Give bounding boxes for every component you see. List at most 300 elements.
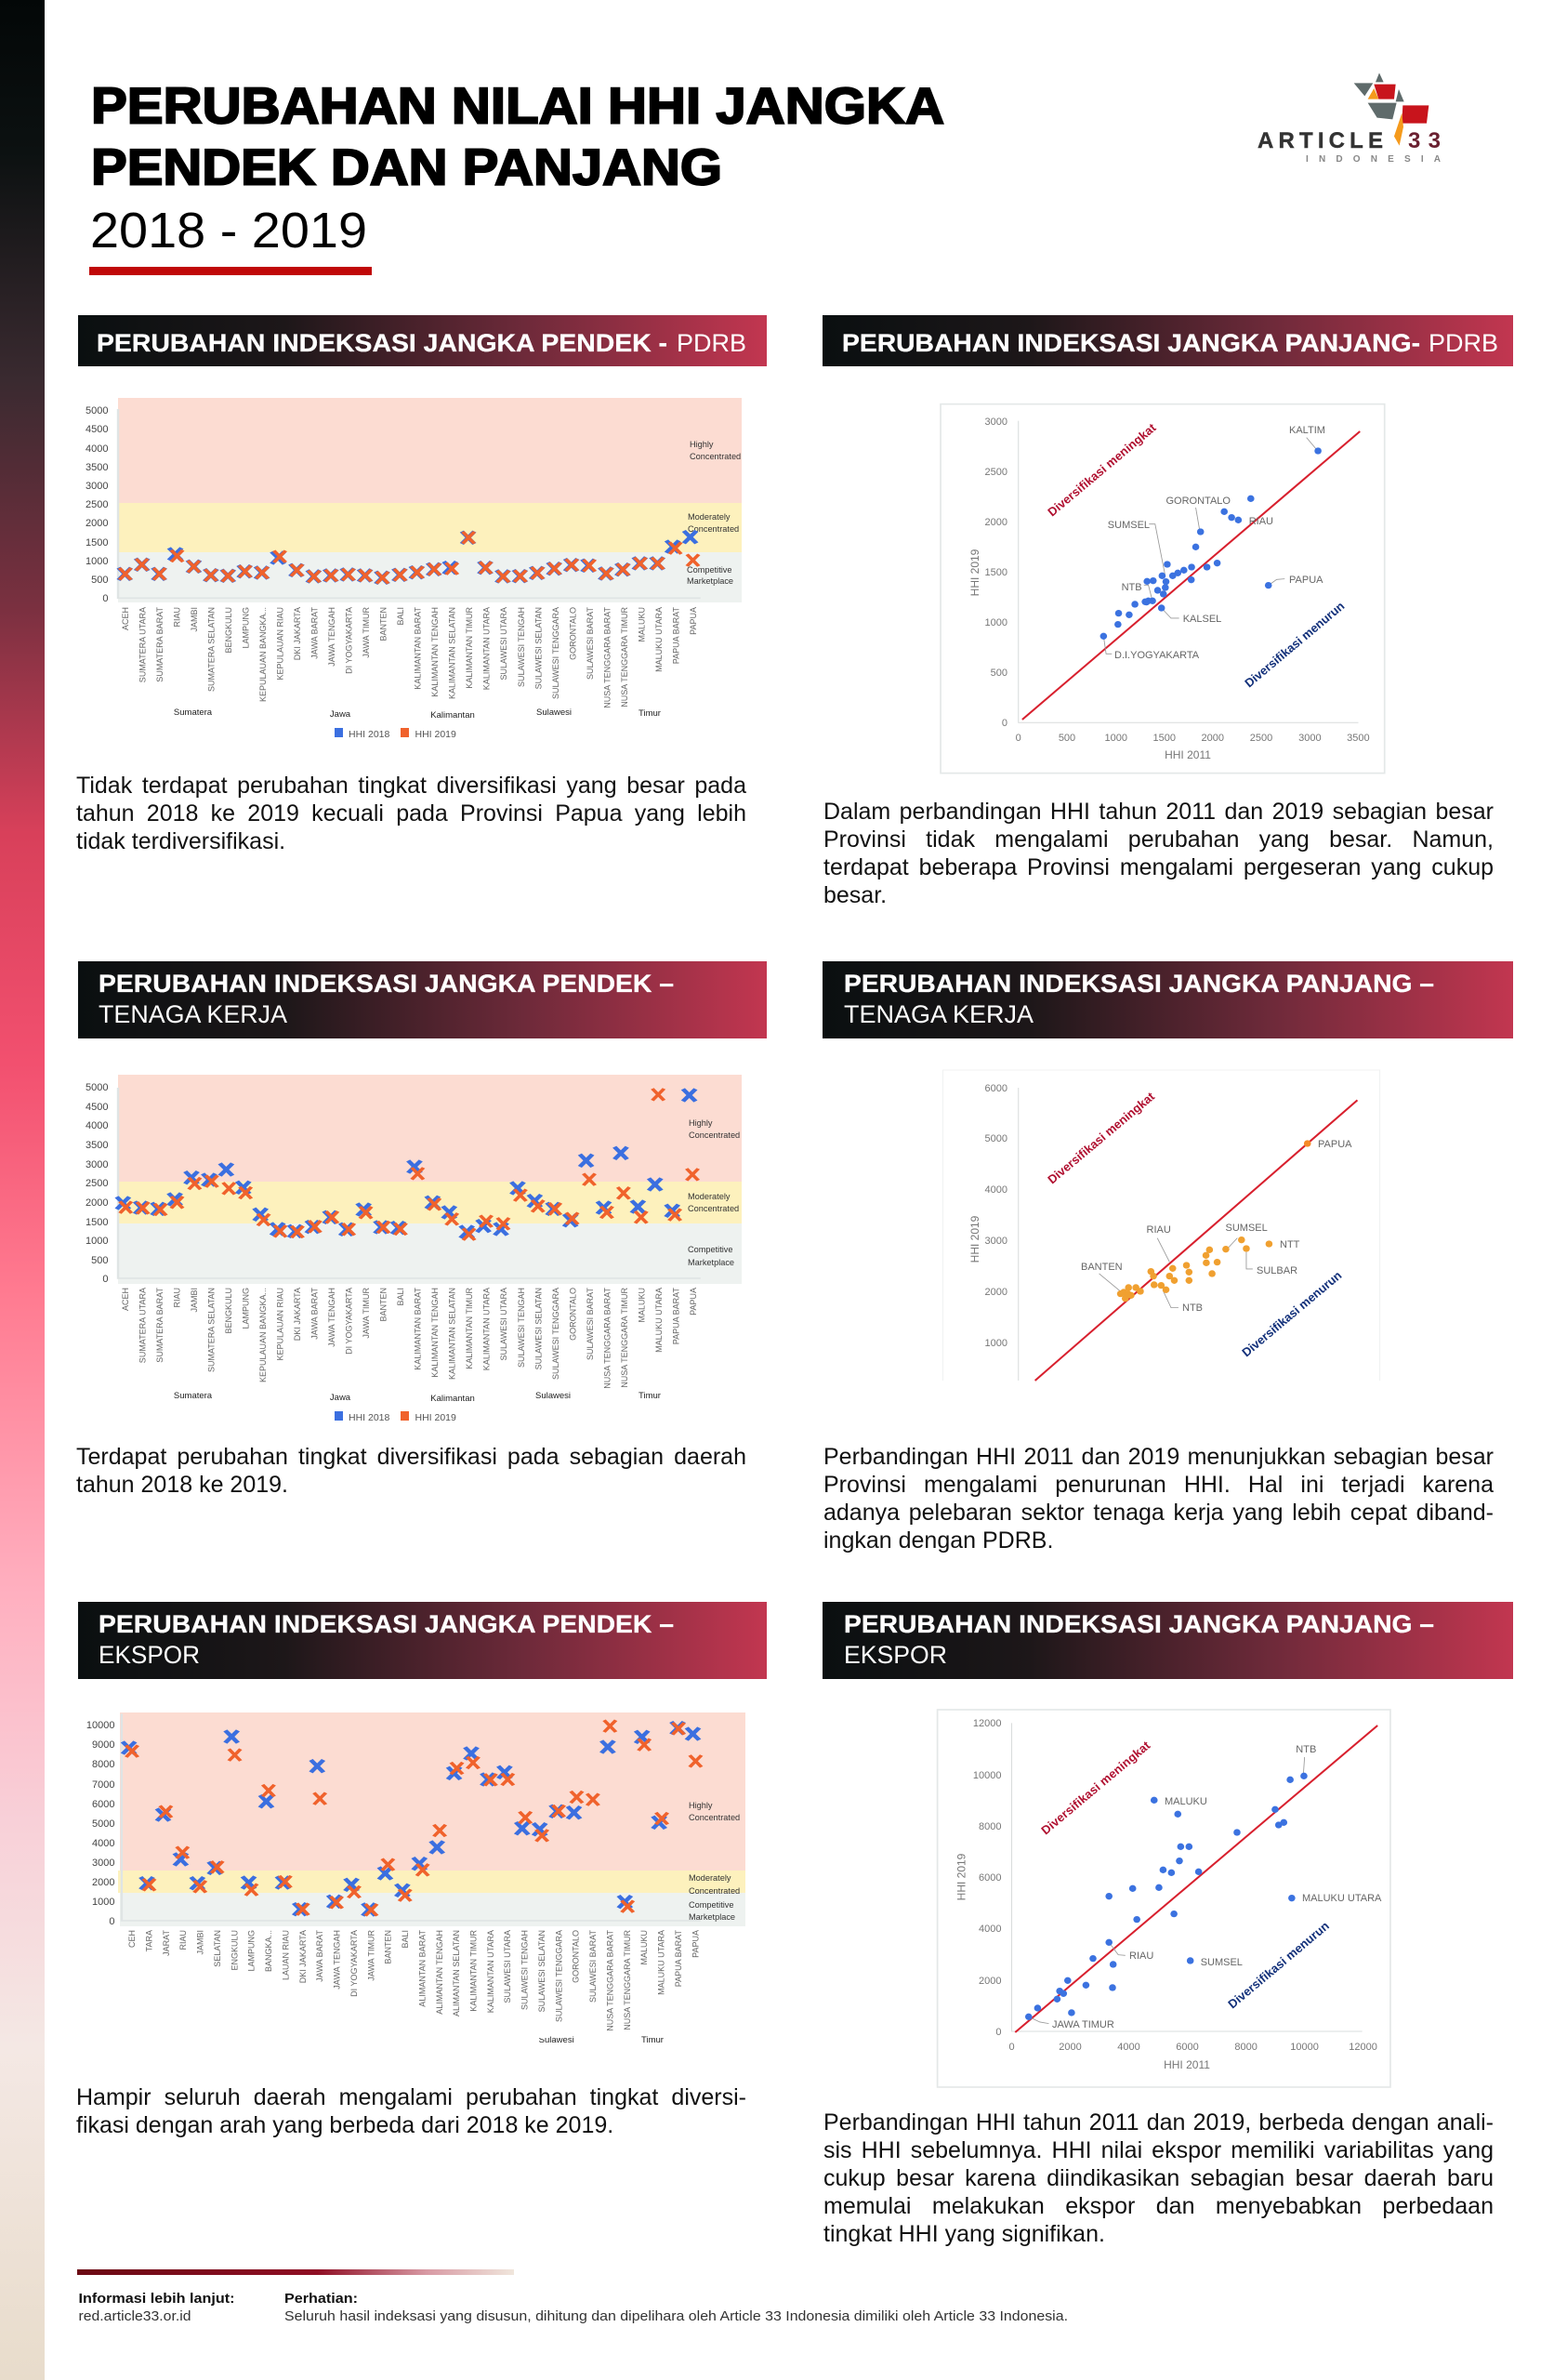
zone labels: Marketplace — [688, 1258, 734, 1267]
province labels: RIAU — [172, 1288, 181, 1308]
logo wordmark: ARTICLE — [1258, 128, 1383, 153]
title line 1: PERUBAHAN NILAI HHI JANGKA — [91, 76, 944, 134]
province labels: PAPUA BARAT — [671, 1287, 680, 1344]
point labels — [1052, 1744, 1382, 2030]
province labels: PAPUA BARAT — [671, 606, 680, 664]
axis ticks: 8000 — [1234, 2042, 1258, 2053]
zone labels: Marketplace — [687, 576, 733, 586]
markers HHI 2019 — [126, 1720, 702, 1916]
province labels: SULAWESI TENGGARA — [551, 1288, 560, 1380]
province labels: JARAT — [162, 1930, 171, 1956]
point labels — [1081, 1139, 1352, 1314]
province labels: BENGKULU — [224, 1288, 233, 1334]
province labels: JAWA BARAT — [310, 607, 320, 659]
zone labels: Concentrated — [689, 1130, 740, 1140]
axis ticks — [985, 416, 1370, 744]
province labels: SUMATERA BARAT — [155, 607, 165, 682]
region labels: Timur — [639, 1391, 661, 1401]
province labels: LAMPUNG — [241, 1288, 250, 1329]
province labels: JAWA BARAT — [310, 1288, 320, 1340]
axis titles — [955, 1853, 1210, 2071]
scatter chart tenaga kerja — [942, 1070, 1380, 1381]
band: highly concentrated — [118, 398, 742, 503]
header bar: TENAGA KERJA — [844, 1000, 1034, 1028]
y axis values: 3500 — [86, 1140, 108, 1151]
axis ticks: 6000 — [979, 1872, 1002, 1884]
footer info heading: Informasi lebih lanjut: — [78, 2291, 234, 2307]
axis ticks: 12000 — [973, 1718, 1002, 1729]
body text — [76, 772, 750, 860]
axis ticks: 4000 — [979, 1924, 1002, 1935]
zone labels — [689, 1801, 740, 1922]
province labels: SULAWESI UTARA — [499, 607, 508, 681]
province labels: BENGKULU — [224, 607, 233, 654]
axis ticks: 4000 — [985, 1184, 1007, 1196]
body text: fikasi dengan arah yang berbeda dari 2018 ke 2019. — [76, 2112, 613, 2138]
province labels: ALIMANTAN TENGAH — [435, 1930, 444, 2015]
legend: HHI 2018 — [349, 1412, 390, 1423]
header bar — [823, 315, 1513, 366]
province labels: ENGKULU — [230, 1930, 239, 1971]
body text — [823, 2109, 1497, 2253]
zone labels: Concentrated — [688, 524, 739, 534]
province labels: SUMATERA UTARA — [138, 1288, 147, 1363]
header bar: PERUBAHAN INDEKSASI JANGKA PANJANG – — [844, 1610, 1434, 1638]
province labels: BANTEN — [379, 607, 388, 641]
axis ticks: 1000 — [985, 617, 1007, 628]
point labels: D.I.YOGYAKARTA — [1114, 650, 1200, 661]
point labels: SUMSEL — [1201, 1957, 1243, 1968]
province labels: SULAWESI SELATAN — [533, 607, 543, 689]
region labels: Kalimantan — [430, 1394, 475, 1404]
province labels: JAWA TIMUR — [362, 1288, 371, 1339]
body text: Terdapat perubahan tingkat diversifikasi pada sebagian daerah — [76, 1444, 746, 1470]
y axis values: 500 — [91, 575, 108, 586]
header bar — [823, 1602, 1513, 1679]
chart: HHI 2018 vs 2019 PDRB — [86, 398, 742, 740]
band: highly concentrated — [120, 1712, 745, 1871]
province labels: DKI JAKARTA — [298, 1930, 308, 1983]
province labels: NUSA TENGGARA TIMUR — [620, 607, 629, 707]
axis ticks: 3500 — [1347, 733, 1370, 744]
body text: terdapat beberapa Provinsi mengalami pergeseran yang cukup — [823, 854, 1494, 880]
markers HHI 2018 — [118, 409, 701, 598]
region labels: Timur — [641, 2035, 664, 2045]
y axis values: 4000 — [86, 1120, 108, 1131]
zone labels: Highly — [689, 1801, 713, 1810]
body text — [823, 798, 1497, 914]
province labels: NUSA TENGGARA BARAT — [602, 1288, 612, 1389]
region labels — [174, 707, 661, 721]
y axis values: 4500 — [86, 1102, 108, 1113]
body text: adanya pelebaran sektor tenaga kerja yang lebih cepat diband- — [823, 1500, 1494, 1526]
y axis values: 7000 — [92, 1779, 115, 1791]
band: competitive marketplace — [118, 552, 742, 602]
body text: Perbandingan HHI 2011 dan 2019 menunjukkan sebagian besar — [823, 1444, 1494, 1470]
axis ticks: 6000 — [1176, 2042, 1199, 2053]
zone labels: Marketplace — [689, 1912, 735, 1922]
body text: tahun 2018 ke 2019. — [76, 1472, 288, 1498]
region labels: Sumatera — [174, 1391, 213, 1401]
y axis values: 3000 — [86, 1159, 108, 1170]
province labels: KALIMANTAN BARAT — [414, 1288, 423, 1370]
province labels: DI YOGYAKARTA — [345, 607, 354, 674]
zone labels: Concentrated — [689, 1813, 740, 1822]
region labels: Sulawesi — [535, 1391, 571, 1401]
axis ticks: 0 — [1002, 718, 1007, 729]
y axis values: 4000 — [86, 443, 108, 455]
zone labels: Concentrated — [689, 1886, 740, 1896]
province labels: ACEH — [121, 607, 130, 630]
province labels: KALIMANTAN TENGAH — [430, 607, 440, 697]
province labels: MALUKU — [637, 1288, 646, 1323]
province labels: KEPULAUAN BANGKA... — [258, 607, 268, 702]
header bar — [78, 961, 767, 1038]
footer gradient rule — [77, 2269, 514, 2275]
markers HHI 2019 — [119, 532, 699, 584]
zone labels: Highly — [690, 440, 714, 449]
header bar: PERUBAHAN INDEKSASI JANGKA PANJANG – — [844, 970, 1434, 998]
point labels: NTT — [1280, 1239, 1300, 1250]
province labels: MALUKU — [637, 607, 646, 642]
province labels: MALUKU UTARA — [654, 1288, 664, 1353]
band: moderately concentrated — [118, 1871, 745, 1893]
footer notice text: Seluruh hasil indeksasi yang disusun, dihitung dan dipelihara oleh Article 33 Indonesia dimiliki oleh Article 33 Indonesia. — [284, 2308, 1068, 2324]
point labels: PAPUA — [1289, 575, 1323, 586]
header bar — [78, 315, 767, 366]
y axis values: 10000 — [86, 1720, 115, 1731]
region labels: Jawa — [330, 709, 351, 720]
province labels: KALIMANTAN BARAT — [414, 607, 423, 690]
header bar: TENAGA KERJA — [99, 1000, 287, 1028]
axis titles: HHI 2011 — [1165, 748, 1211, 761]
sidebar gradient stripe — [0, 0, 45, 2380]
zone labels: Moderately — [689, 1873, 731, 1883]
y axis values: 1000 — [86, 1236, 108, 1247]
annotation: diversifikasi menurun: Diversifikasi menurun — [1239, 1268, 1344, 1359]
province labels: SULAWESI BARAT — [588, 1930, 598, 2003]
panel: long term labour — [823, 961, 1513, 1559]
province labels: GORONTALO — [568, 607, 577, 660]
point labels: SUMSEL — [1225, 1223, 1268, 1234]
header bar — [78, 1602, 767, 1679]
zone labels: Competitive — [688, 1245, 733, 1254]
header bar: PERUBAHAN INDEKSASI JANGKA PANJANG- — [842, 329, 1420, 357]
province labels: DI YOGYAKARTA — [349, 1930, 359, 1997]
zone labels: Competitive — [689, 1900, 734, 1910]
province labels: SULAWESI UTARA — [499, 1288, 508, 1361]
axis ticks: 0 — [1008, 2042, 1015, 2053]
band: moderately concentrated — [118, 1182, 742, 1223]
point labels: SULBAR — [1257, 1265, 1297, 1276]
axis titles: HHI 2019 — [968, 549, 981, 596]
body text: tingkat HHI yang signifikan. — [823, 2221, 1105, 2247]
markers HHI 2018 — [122, 1713, 701, 1921]
y axis values: 3000 — [92, 1858, 115, 1869]
panel: short term PDRB — [76, 315, 767, 860]
axis ticks: 4000 — [1117, 2042, 1140, 2053]
y axis values — [86, 1082, 108, 1285]
body text: tahun 2018 ke 2019 kecuali pada Provinsi Papua yang lebih — [76, 800, 746, 826]
province labels: PAPUA — [691, 1930, 700, 1958]
province labels: KEPULAUAN BANGKA... — [258, 1288, 268, 1382]
y axis values: 5000 — [92, 1818, 115, 1830]
y axis values — [86, 1720, 115, 1927]
point labels: JAWA TIMUR — [1052, 2019, 1114, 2030]
body text: Perbandingan HHI tahun 2011 dan 2019, berbeda dengan anali- — [823, 2109, 1494, 2135]
zone labels — [688, 1118, 740, 1267]
province labels: DI YOGYAKARTA — [345, 1288, 354, 1355]
province labels: JAWA TENGAH — [327, 1288, 336, 1347]
province labels: NUSA TENGGARA BARAT — [602, 607, 612, 708]
y axis values: 9000 — [92, 1739, 115, 1751]
province labels: JAMBI — [190, 1288, 199, 1313]
point labels — [1108, 425, 1325, 661]
province labels: PAPUA — [689, 1288, 698, 1316]
point labels: MALUKU UTARA — [1302, 1893, 1382, 1904]
annotation: diversifikasi meningkat: Diversifikasi meningkat — [1045, 420, 1159, 519]
axis ticks: 500 — [991, 668, 1007, 679]
axis ticks: 5000 — [985, 1133, 1007, 1144]
logo subtitle: INDONESIA — [1306, 154, 1441, 165]
y axis values: 1500 — [86, 537, 108, 549]
y axis values: 4500 — [86, 424, 108, 435]
province labels: ALIMANTAN BARAT — [417, 1930, 427, 2007]
panel: short term labour — [76, 961, 767, 1503]
body text: Hampir seluruh daerah mengalami perubahan tingkat diversi- — [76, 2084, 746, 2110]
title line 2: PENDEK DAN PANJANG — [91, 138, 722, 195]
axis ticks: 1000 — [985, 1338, 1007, 1349]
y axis values: 500 — [91, 1255, 108, 1266]
body text: Tidak terdapat perubahan tingkat diversifikasi yang besar pada — [76, 773, 746, 799]
province labels: NUSA TENGGARA TIMUR — [620, 1288, 629, 1388]
province labels: JAWA TENGAH — [333, 1930, 342, 1990]
body text: Dalam perbandingan HHI tahun 2011 dan 2019 sebagian besar — [823, 799, 1494, 825]
panel: long term export — [823, 1602, 1513, 2253]
point labels: NTB — [1122, 582, 1142, 593]
footer — [77, 2269, 1068, 2324]
panel: long term PDRB — [823, 315, 1513, 914]
footer notice heading: Perhatian: — [284, 2291, 358, 2307]
province labels: RIAU — [172, 607, 181, 628]
axis titles: HHI 2019 — [955, 1853, 968, 1900]
header bar — [823, 961, 1513, 1038]
province labels: LAMPUNG — [247, 1930, 257, 1972]
legend: HHI 2018 — [349, 729, 390, 740]
province labels: DKI JAKARTA — [293, 1288, 302, 1341]
province labels: KALIMANTAN TENGAH — [430, 1288, 440, 1378]
axis ticks: 2000 — [979, 1976, 1002, 1987]
province labels: SULAWESI BARAT — [586, 1288, 595, 1360]
province labels: SULAWESI TENGGARA — [554, 1930, 563, 2022]
band: competitive marketplace — [118, 1223, 742, 1284]
province labels: SUMATERA SELATAN — [206, 607, 216, 692]
province labels: BANTEN — [384, 1930, 393, 1964]
axis titles: HHI 2011 — [1164, 2058, 1210, 2071]
logo number: 33 — [1408, 128, 1441, 153]
y axis values: 5000 — [86, 1082, 108, 1093]
province labels: BANTEN — [379, 1288, 388, 1322]
province labels: SULAWESI SELATAN — [537, 1930, 546, 2012]
province labels: BALI — [401, 1930, 410, 1949]
point labels: RIAU — [1129, 1950, 1153, 1962]
province labels: BALI — [396, 1288, 405, 1306]
province labels: PAPUA BARAT — [674, 1930, 683, 1987]
axis ticks: 2000 — [1202, 733, 1224, 744]
province labels: NUSA TENGGARA TIMUR — [623, 1930, 632, 2030]
zone labels: Concentrated — [688, 1204, 739, 1213]
region labels: Jawa — [330, 1393, 351, 1403]
header bar: PDRB — [677, 329, 746, 357]
annotation: diversifikasi meningkat: Diversifikasi meningkat — [1038, 1738, 1153, 1837]
body text: besar. — [823, 882, 887, 908]
y axis values: 1500 — [86, 1217, 108, 1228]
y axis values: 2500 — [86, 1178, 108, 1189]
axis ticks: 500 — [1059, 733, 1075, 744]
province labels: SULAWESI TENGAH — [517, 607, 526, 687]
scatter chart ekspor — [938, 1710, 1390, 2087]
axis ticks: 0 — [1016, 733, 1021, 744]
header bar: PERUBAHAN INDEKSASI JANGKA PENDEK - — [97, 329, 667, 357]
province labels: KEPULAUAN RIAU — [275, 607, 284, 681]
body text: sis HHI sebelumnya. HHI nilai ekspor memiliki variabilitas yang — [823, 2137, 1494, 2163]
markers HHI 2018 — [117, 1088, 701, 1278]
body text — [76, 1443, 750, 1503]
y axis values: 0 — [102, 593, 108, 604]
panel: short term export — [76, 1602, 767, 2144]
province labels: SELATAN — [213, 1930, 222, 1967]
axis ticks: 12000 — [1349, 2042, 1377, 2053]
body text: cukup besar karena diindikasikan sebagian besar daerah baru — [823, 2165, 1494, 2191]
axis ticks: 2000 — [985, 517, 1007, 528]
annotation: diversifikasi menurun: Diversifikasi menurun — [1225, 1919, 1332, 2011]
body text: tidak terdiversifikasi. — [76, 828, 285, 854]
point labels: RIAU — [1147, 1224, 1171, 1236]
axis ticks: 3000 — [1298, 733, 1322, 744]
chart frame, axis, line and points — [942, 1070, 1380, 1381]
province labels: TARA — [145, 1930, 154, 1951]
point labels: SUMSEL — [1108, 520, 1150, 531]
province labels: SUMATERA BARAT — [155, 1288, 165, 1363]
chart: HHI 2018 vs 2019 ekspor — [86, 1712, 745, 2045]
region labels: Sumatera — [174, 707, 213, 718]
zone labels: Highly — [689, 1118, 713, 1128]
region labels — [174, 1391, 661, 1404]
point labels: MALUKU — [1165, 1796, 1207, 1807]
province labels: SUMATERA SELATAN — [206, 1288, 216, 1372]
legend: HHI 2019 — [415, 729, 456, 740]
legend: HHI 2019 — [415, 1412, 456, 1423]
y axis values: 2000 — [86, 1197, 108, 1209]
province labels: CEH — [127, 1930, 137, 1948]
point labels: KALTIM — [1289, 425, 1325, 436]
y axis values: 0 — [102, 1274, 108, 1285]
province labels: MALUKU — [639, 1930, 649, 1965]
province labels: GORONTALO — [568, 1288, 577, 1341]
province labels: KALIMANTAN SELATAN — [448, 607, 457, 699]
axis ticks: 0 — [995, 2027, 1002, 2038]
province labels: PAPUA — [689, 607, 698, 635]
band: moderately concentrated — [118, 503, 742, 552]
province labels: SUMATERA UTARA — [138, 607, 147, 682]
province labels: ALIMANTAN SELATAN — [452, 1930, 461, 2016]
province labels: KALIMANTAN SELATAN — [448, 1288, 457, 1380]
province labels: JAWA BARAT — [315, 1930, 324, 1982]
region labels: Kalimantan — [430, 710, 475, 721]
header bar: EKSPOR — [99, 1641, 200, 1669]
region labels: Sulawesi — [539, 2035, 574, 2045]
header bar: PDRB — [1429, 329, 1498, 357]
band: highly concentrated — [118, 1075, 742, 1182]
annotation: diversifikasi meningkat: Diversifikasi meningkat — [1045, 1089, 1158, 1186]
legend — [335, 728, 456, 740]
y axis values: 2000 — [92, 1877, 115, 1888]
axis ticks: 2500 — [1250, 733, 1272, 744]
y axis values: 1000 — [92, 1897, 115, 1908]
header bar: EKSPOR — [844, 1641, 947, 1669]
footer link: red.article33.or.id — [78, 2308, 191, 2324]
region labels: Sulawesi — [536, 707, 572, 718]
province labels: KALIMANTAN UTARA — [486, 1930, 495, 2013]
legend — [335, 1411, 456, 1423]
point labels: NTB — [1182, 1302, 1203, 1314]
y axis values: 4000 — [92, 1838, 115, 1849]
province labels: JAWA TIMUR — [366, 1930, 375, 1981]
title block — [89, 76, 944, 275]
y axis values: 6000 — [92, 1799, 115, 1810]
body text — [76, 2083, 750, 2144]
body text: Provinsi mengalami penurunan HHI. Hal ini terjadi karena — [823, 1472, 1494, 1498]
point labels: RIAU — [1249, 516, 1273, 527]
y axis values: 1000 — [86, 556, 108, 567]
point labels: KALSEL — [1183, 614, 1221, 625]
year subtitle: 2018 - 2019 — [90, 203, 367, 258]
markers HHI 2019 — [120, 1089, 698, 1240]
chart: HHI 2018 vs 2019 tenaga kerja — [86, 1075, 742, 1423]
zone labels: Concentrated — [690, 452, 741, 461]
axis ticks — [973, 1718, 1377, 2053]
body text: Provinsi tidak mengalami perubahan yang besar. Namun, — [823, 826, 1494, 853]
province labels: KEPULAUAN RIAU — [275, 1288, 284, 1361]
zone labels: Moderately — [688, 512, 731, 522]
y axis values: 5000 — [86, 405, 108, 416]
axis ticks: 1500 — [985, 567, 1007, 578]
axis ticks: 1000 — [1105, 733, 1127, 744]
y axis values — [86, 405, 108, 604]
province labels: MALUKU UTARA — [654, 607, 664, 672]
province labels: JAMBI — [190, 607, 199, 632]
y axis values: 8000 — [92, 1759, 115, 1770]
province labels: KALIMANTAN TIMUR — [468, 1930, 478, 2012]
point labels: GORONTALO — [1165, 496, 1231, 507]
province labels: DKI JAKARTA — [293, 607, 302, 660]
province labels: KALIMANTAN TIMUR — [465, 607, 474, 689]
chart frame, axes, line and points — [938, 1710, 1390, 2087]
scatter chart PDRB — [941, 404, 1385, 774]
y axis values: 0 — [109, 1916, 115, 1927]
region labels — [537, 2033, 664, 2045]
logo: Article 33 Indonesia — [1258, 73, 1441, 165]
province labels: SULAWESI TENGAH — [520, 1930, 530, 2010]
province labels: ACEH — [121, 1288, 130, 1311]
province labels: JAWA TENGAH — [327, 607, 336, 667]
y axis values: 3500 — [86, 462, 108, 473]
header bar: PERUBAHAN INDEKSASI JANGKA PENDEK – — [99, 1610, 674, 1638]
province labels — [121, 606, 698, 708]
axis titles — [968, 549, 1211, 761]
axis title: HHI 2019 — [968, 1215, 981, 1263]
province labels: SULAWESI BARAT — [586, 607, 595, 680]
